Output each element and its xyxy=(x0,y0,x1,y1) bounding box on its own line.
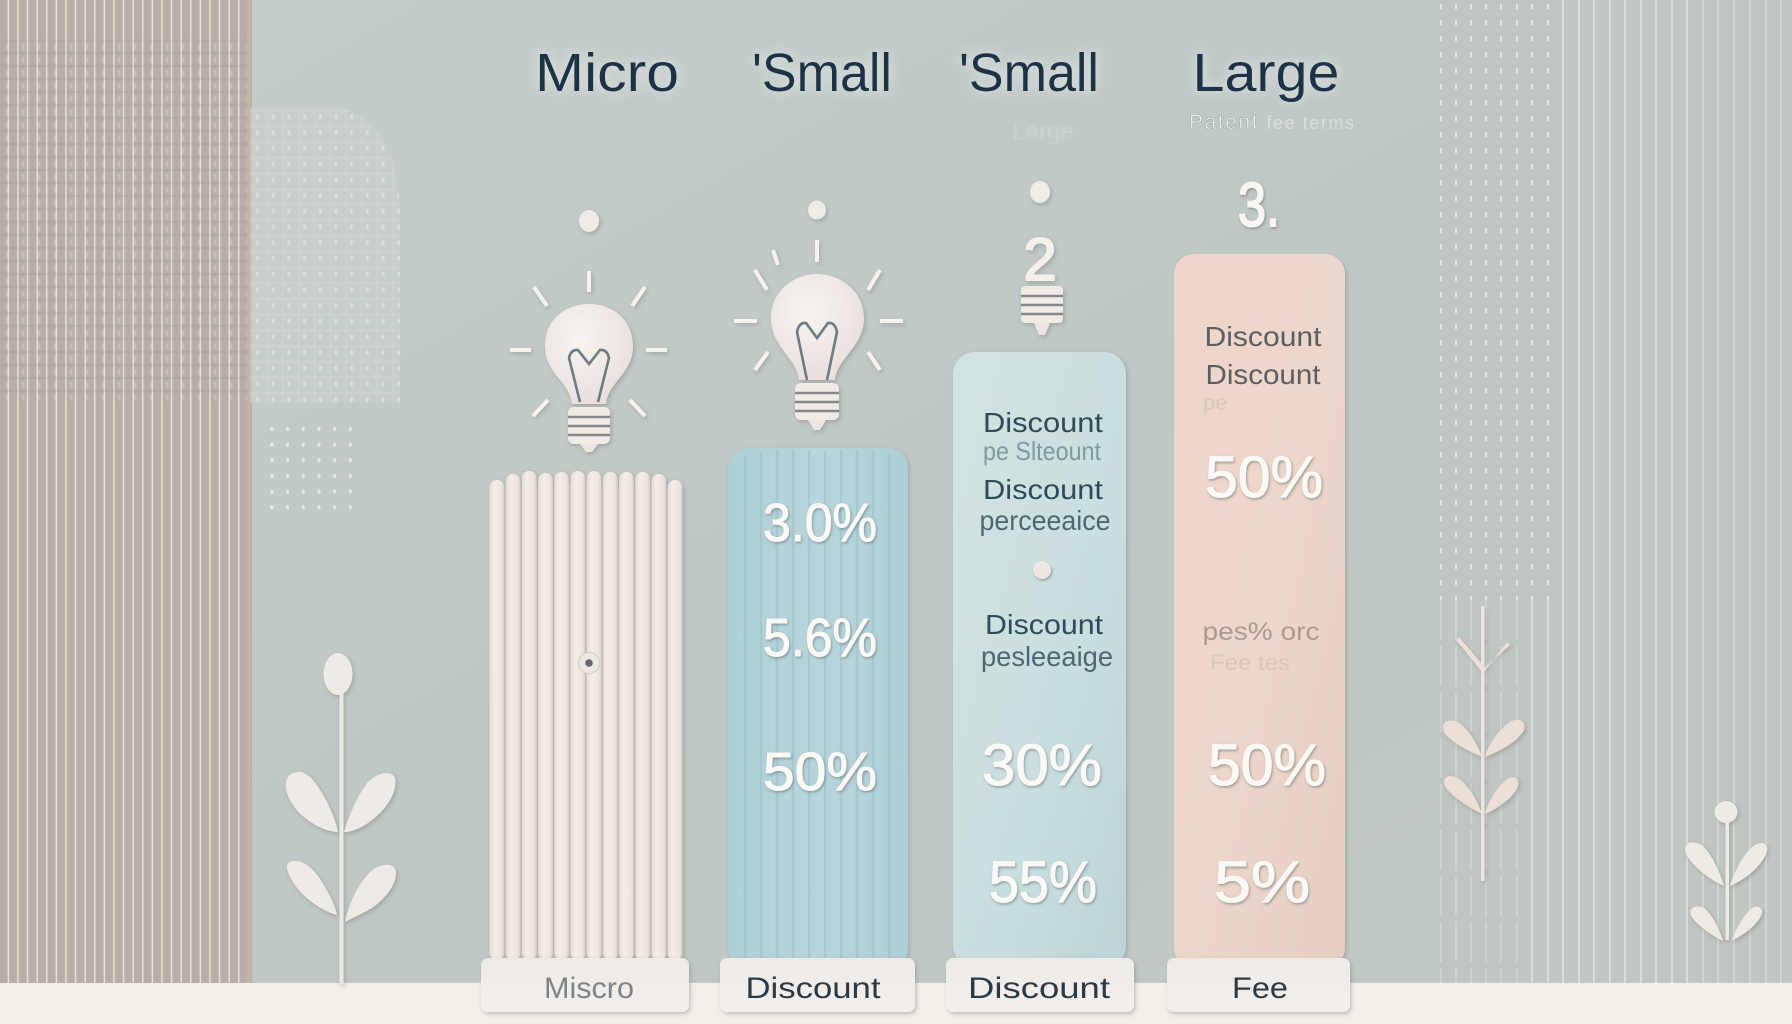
bar: small second xyxy=(953,352,1126,968)
bulb: small xyxy=(734,200,903,430)
light rays xyxy=(734,240,903,370)
label: percentage: perceeaice xyxy=(980,505,1110,536)
light rays xyxy=(510,271,667,416)
base label: Discount xyxy=(968,972,1111,1005)
value: 5%: 5% xyxy=(1214,850,1310,915)
bulb: micro xyxy=(510,210,667,452)
heading: Large: Large xyxy=(1192,43,1340,103)
base: small xyxy=(720,958,915,1012)
label: Discount: Discount xyxy=(983,474,1103,505)
heading: Small second: 'Small xyxy=(959,43,1099,103)
value: 55%: 55% xyxy=(989,850,1097,915)
ribs xyxy=(745,450,889,958)
headings xyxy=(535,43,1354,145)
base: large xyxy=(1167,958,1350,1012)
number two: 2 xyxy=(1023,226,1057,293)
subheading: faint Large: Large xyxy=(1012,118,1074,145)
dot above number two xyxy=(1030,181,1050,203)
filament xyxy=(797,323,837,380)
value: 50%: 50% xyxy=(1205,445,1323,510)
bulb glass xyxy=(771,274,864,380)
base label: Discount xyxy=(746,972,881,1005)
panel: right striped wall xyxy=(1440,0,1792,983)
base: micro xyxy=(481,958,689,1012)
base label: Fee xyxy=(1232,972,1288,1005)
heading: Small: 'Small xyxy=(752,43,892,103)
dot on bar xyxy=(1033,561,1051,579)
label: Discount: Discount xyxy=(983,407,1103,438)
knob on micro bar xyxy=(578,652,600,674)
number three: 3. xyxy=(1238,171,1280,240)
icon: number two with screw xyxy=(1021,181,1063,335)
value: 5.6%: 5.6% xyxy=(763,608,877,668)
ribs xyxy=(490,471,682,960)
label: faint Fee: Fee tes xyxy=(1210,650,1290,675)
hatched rounded patch xyxy=(250,107,400,403)
label: faint pe: pe xyxy=(1203,390,1227,415)
bar: micro xyxy=(490,471,682,960)
label: Discount: Discount xyxy=(985,609,1103,640)
bar: small xyxy=(728,448,908,968)
label: Discount: Discount xyxy=(1204,321,1322,352)
value: 50%: 50% xyxy=(1208,733,1326,798)
panel: left striped wall xyxy=(0,0,252,983)
plant: right small xyxy=(1685,801,1767,941)
rib backing xyxy=(490,485,682,959)
filament xyxy=(569,350,609,402)
label: percentage: pesleeaige xyxy=(981,641,1113,672)
label: garbled percentage: pe Slteount xyxy=(983,436,1102,466)
subheading: Patent fees: Patent fee terms xyxy=(1189,111,1354,134)
base label: Miscro xyxy=(544,972,634,1005)
bulb glass xyxy=(545,304,633,404)
value: 30%: 30% xyxy=(982,733,1102,798)
label: faint percentage: pes% orc xyxy=(1202,618,1320,646)
screw base xyxy=(568,407,610,452)
bar: large xyxy=(1174,254,1345,968)
floor xyxy=(0,983,1792,1024)
heading: Micro: Micro xyxy=(535,43,679,103)
dot grid xyxy=(263,418,363,518)
plant: right tall xyxy=(1443,606,1524,881)
plant: left xyxy=(286,653,396,984)
value: 50%: 50% xyxy=(763,742,877,802)
base: small second xyxy=(946,958,1134,1012)
screw base xyxy=(795,383,839,430)
dot above small bulb xyxy=(808,200,826,220)
dot above micro bulb xyxy=(579,210,599,232)
label: Discount: Discount xyxy=(1206,359,1321,390)
value: 3.0%: 3.0% xyxy=(763,493,877,553)
screw base xyxy=(1021,286,1063,335)
